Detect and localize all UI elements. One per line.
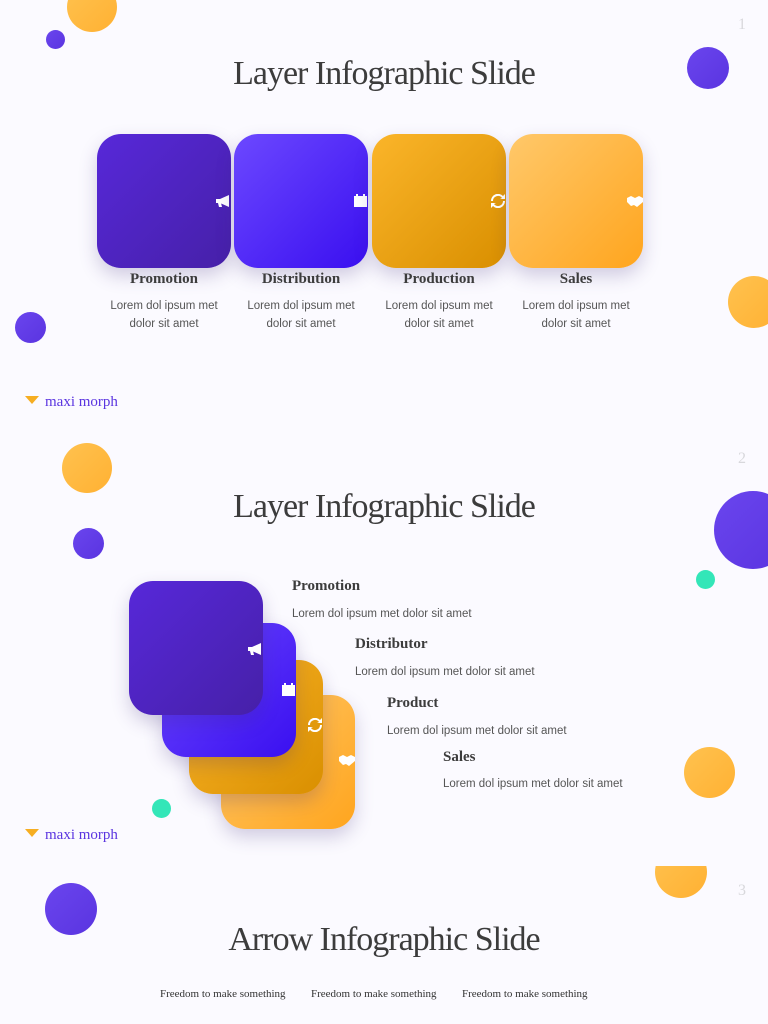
panel: four boxes row: dolor sit amet [129,318,199,330]
brand 1: maxi morph [45,394,118,410]
title 1: Layer Infographic Slide [233,55,535,92]
brand 2: maxi morph [45,827,118,843]
box promotion [97,134,231,268]
text: 3 [738,882,746,899]
labels: Promotion [130,271,198,287]
panel: four boxes row: dolor sit amet [541,318,611,330]
text list [292,578,623,790]
arrow labels: Freedom to make something [160,988,286,1000]
panel: four boxes row: Lorem dol ipsum met [110,300,218,312]
text: 2 [738,450,746,467]
text list: Product [387,695,438,711]
box distribution [234,134,368,268]
panel: stacked boxes [120,580,364,846]
panel: four boxes row: Lorem dol ipsum met [247,300,355,312]
text list: Lorem dol ipsum met dolor sit amet [355,666,535,678]
text list: Sales [443,749,476,765]
slide numbers: 1 [738,16,746,33]
text list: Lorem dol ipsum met dolor sit amet [443,778,623,790]
text list: Lorem dol ipsum met dolor sit amet [292,608,472,620]
text list: Lorem dol ipsum met dolor sit amet [387,725,567,737]
panel: four boxes row: dolor sit amet [404,318,474,330]
panel: four boxes row [88,134,652,330]
title 2: Layer Infographic Slide [233,488,535,525]
panel: four boxes row: Sales [560,271,592,287]
box production [372,134,506,268]
arrow labels [160,988,588,1000]
panel: four boxes row: Production [403,271,475,287]
panel: four boxes row: Lorem dol ipsum met [522,300,630,312]
panel: four boxes row: Distribution [262,271,340,287]
panel: four boxes row: dolor sit amet [266,318,336,330]
text list: Distributor [355,636,428,652]
box sales [509,134,643,268]
arrow labels: Freedom to make something [462,988,588,1000]
text list: Promotion [292,578,360,594]
title 3: Arrow Infographic Slide [228,921,540,958]
arrow labels: Freedom to make something [311,988,437,1000]
panel: four boxes row: Lorem dol ipsum met [385,300,493,312]
